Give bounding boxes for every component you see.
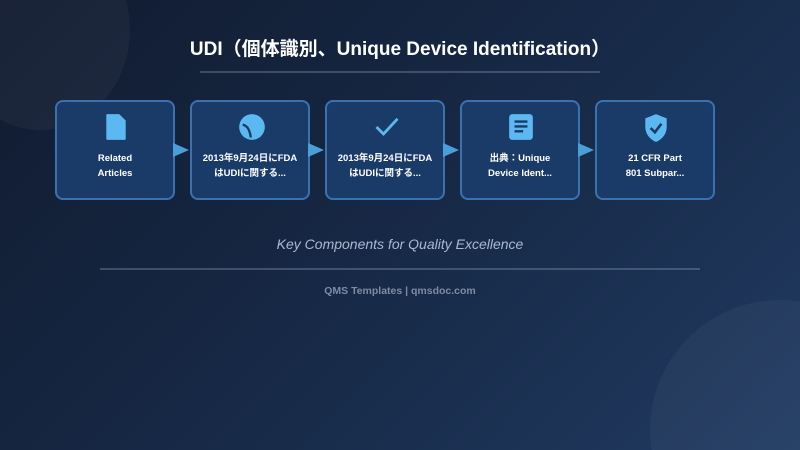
icon: leaf circle [239, 114, 265, 140]
text [203, 152, 297, 179]
icon: document [106, 114, 126, 140]
panel: step 1 [55, 100, 175, 200]
text: 出典：Unique [490, 153, 550, 164]
text: はUDIに関する... [349, 168, 421, 179]
icon: text document [509, 114, 533, 140]
arrow 1 [173, 143, 189, 157]
text: 2013年9月24日にFDA [338, 153, 432, 164]
text: Device Ident... [488, 168, 552, 179]
text [626, 153, 684, 179]
text [98, 153, 132, 179]
text: はUDIに関する... [214, 168, 286, 179]
arrow 4 [578, 143, 594, 157]
panel: step 2 [190, 100, 310, 200]
arrow 2 [308, 143, 324, 157]
text [488, 152, 552, 179]
icon: shield check [645, 114, 667, 142]
text: 801 Subpar... [626, 168, 684, 179]
text: 21 CFR Part [628, 153, 682, 164]
title: UDI（個体識別、Unique Device Identification） [190, 39, 610, 60]
panel: step 3 [325, 100, 445, 200]
text: 2013年9月24日にFDA [203, 153, 297, 164]
text: Related [98, 153, 132, 164]
subtitle: Key Components for Quality Excellence [277, 236, 523, 252]
icon: check [376, 118, 398, 136]
text: Articles [98, 168, 132, 179]
panel: step 4 [460, 100, 580, 200]
panel: step 5 [595, 100, 715, 200]
arrow 3 [443, 143, 459, 157]
footer: QMS Templates | qmsdoc.com [324, 285, 476, 297]
text [338, 152, 432, 179]
